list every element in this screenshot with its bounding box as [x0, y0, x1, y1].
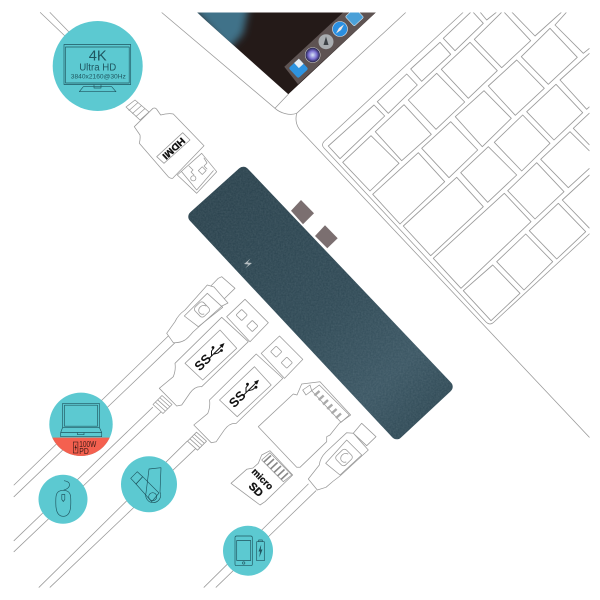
- SD card: [258, 382, 351, 467]
- red power delivery band: [52, 438, 110, 456]
- USB-A strain relief: [153, 396, 172, 414]
- dock icon: launchpad: [318, 34, 334, 49]
- circle: 4K Ultra HD: [53, 21, 143, 111]
- icon: laptop: [61, 403, 102, 437]
- USB-A connector body two: [194, 354, 283, 443]
- microSD contacts: [262, 453, 292, 482]
- circle: 100W PD laptop charging: [49, 392, 113, 456]
- USB-C hub body: [194, 173, 447, 433]
- USB-A cable one: [14, 299, 268, 552]
- icon: flash drive: [131, 468, 161, 503]
- circle: mouse: [38, 475, 88, 524]
- USB-A plug two: [261, 336, 303, 378]
- USB-A label box two: [220, 367, 271, 417]
- laptop screen wallpaper: [197, 12, 376, 94]
- USB-C cable one: [14, 277, 235, 497]
- microSD label: SD: [246, 480, 265, 500]
- USB-A label box: SS: [191, 351, 214, 374]
- USB-C tip: [207, 277, 235, 299]
- USB-C connector body two: [308, 433, 368, 490]
- HDMI plug: [177, 153, 217, 193]
- USB-A strain relief two: [188, 432, 206, 450]
- HDMI cable and connector: [40, 12, 217, 193]
- dock icon: siri: [305, 48, 320, 62]
- USB-A label box two: SS: [226, 387, 249, 410]
- 100W PD text: [79, 440, 97, 456]
- 100W PD text: 100W: [79, 440, 97, 449]
- icon: mouse: [56, 481, 71, 516]
- circle: USB flash drive: [121, 456, 177, 512]
- microSD label: micro: [249, 466, 275, 493]
- dock icon: finder: [289, 59, 308, 78]
- icon: lightning bolt: [244, 258, 252, 268]
- laptop dock: [284, 8, 376, 84]
- icon: monitor: [64, 44, 131, 92]
- icon: smartphone: [235, 536, 252, 566]
- laptop body outline: [162, 12, 590, 438]
- USB-C label box two: [326, 440, 362, 475]
- USB-A connector body: [159, 317, 248, 406]
- SD card contacts: [303, 385, 349, 422]
- monitor text: [71, 48, 126, 81]
- dock icon: safari: [332, 22, 348, 36]
- circle: phone charging: [223, 526, 273, 576]
- USB-C tip two: [353, 423, 376, 446]
- keyboard keys: [328, 11, 590, 321]
- USB-A cable two: [39, 336, 303, 587]
- icon: battery charging: [257, 540, 264, 561]
- icon: USB trident: [210, 343, 224, 358]
- icon: battery: [73, 442, 78, 453]
- microSD label: [246, 466, 275, 500]
- USB-A label box: [185, 330, 237, 380]
- microSD card: [231, 451, 293, 505]
- dock icon: mail: [346, 12, 364, 26]
- USB-A plug: [227, 299, 268, 342]
- hub pins: [291, 200, 338, 248]
- HDMI connector body: [134, 108, 204, 178]
- USB-C label box: [184, 293, 223, 327]
- USB-C connector body: [167, 285, 228, 343]
- HDMI label: [157, 133, 190, 163]
- USB-C cable two: [204, 423, 376, 587]
- HDMI label: HDMI: [160, 135, 187, 161]
- icon: USB trident two: [244, 380, 259, 395]
- 100W PD text: PD: [79, 447, 89, 456]
- monitor text: Ultra HD: [79, 63, 116, 74]
- HDMI strain relief: [126, 100, 149, 120]
- monitor text: 3840x2160@30Hz: [71, 74, 126, 81]
- laptop illustration: [162, 2, 590, 438]
- monitor text: 4K: [89, 48, 107, 64]
